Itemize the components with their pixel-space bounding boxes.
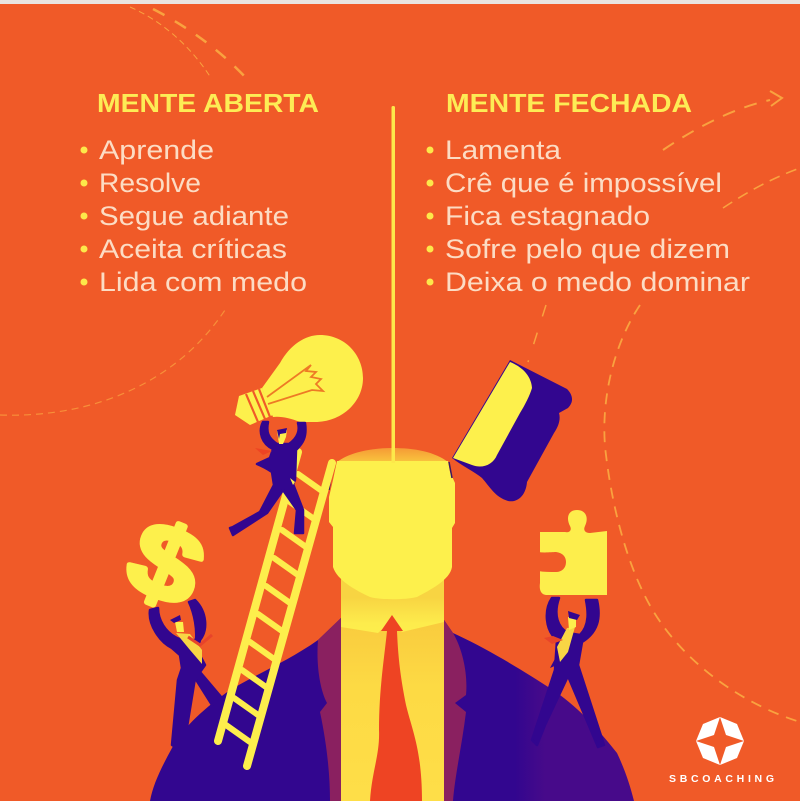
ladder: [218, 452, 332, 766]
list: mente aberta: Resolve: [99, 168, 201, 198]
head hinge edges: [329, 462, 452, 490]
heading: mente aberta: MENTE ABERTA: [97, 88, 319, 118]
icon: puzzle piece: [538, 510, 607, 595]
arrow head: [770, 91, 782, 106]
necktie: [370, 615, 422, 801]
logo text: SBCOACHING: [669, 773, 774, 785]
list: mente fechada: Fica estagnado: [445, 201, 650, 231]
list: mente fechada: Deixa o medo dominar: [445, 267, 750, 297]
logo: SBCoaching: [669, 717, 774, 785]
man climbing ladder: [230, 422, 306, 535]
list: mente aberta: Aceita críticas: [99, 234, 287, 264]
list: mente fechada: Crê que é impossível: [445, 168, 722, 198]
icon: star octagon: [696, 717, 744, 765]
neck: [341, 560, 444, 635]
heading: mente fechada: MENTE FECHADA: [446, 88, 692, 118]
jacket: [150, 617, 634, 801]
icon: light bulb: [235, 335, 363, 425]
list: mente aberta: Aprende: [99, 135, 214, 165]
icon: dollar sign: $: [112, 497, 220, 630]
open brain dome: [337, 448, 448, 462]
list: mente aberta: Segue adiante: [99, 201, 289, 231]
list: mente fechada: Sofre pelo que dizem: [445, 234, 730, 264]
list: mente aberta: [80, 135, 307, 297]
divider overlap on dome: [392, 448, 395, 463]
man with dollar: [150, 600, 222, 750]
panel: mente aberta: [80, 88, 319, 297]
list: mente fechada: [426, 135, 750, 297]
list: mente fechada: Lamenta: [445, 135, 562, 165]
illustration: businessman with open head: [112, 335, 634, 801]
man with puzzle piece: [532, 598, 604, 747]
list: mente aberta: Lida com medo: [99, 267, 307, 297]
flip-top head lid: [452, 360, 572, 501]
divider line: [392, 106, 395, 462]
shirt: [341, 620, 444, 801]
head: [329, 461, 455, 599]
panel: mente fechada: [426, 88, 750, 297]
